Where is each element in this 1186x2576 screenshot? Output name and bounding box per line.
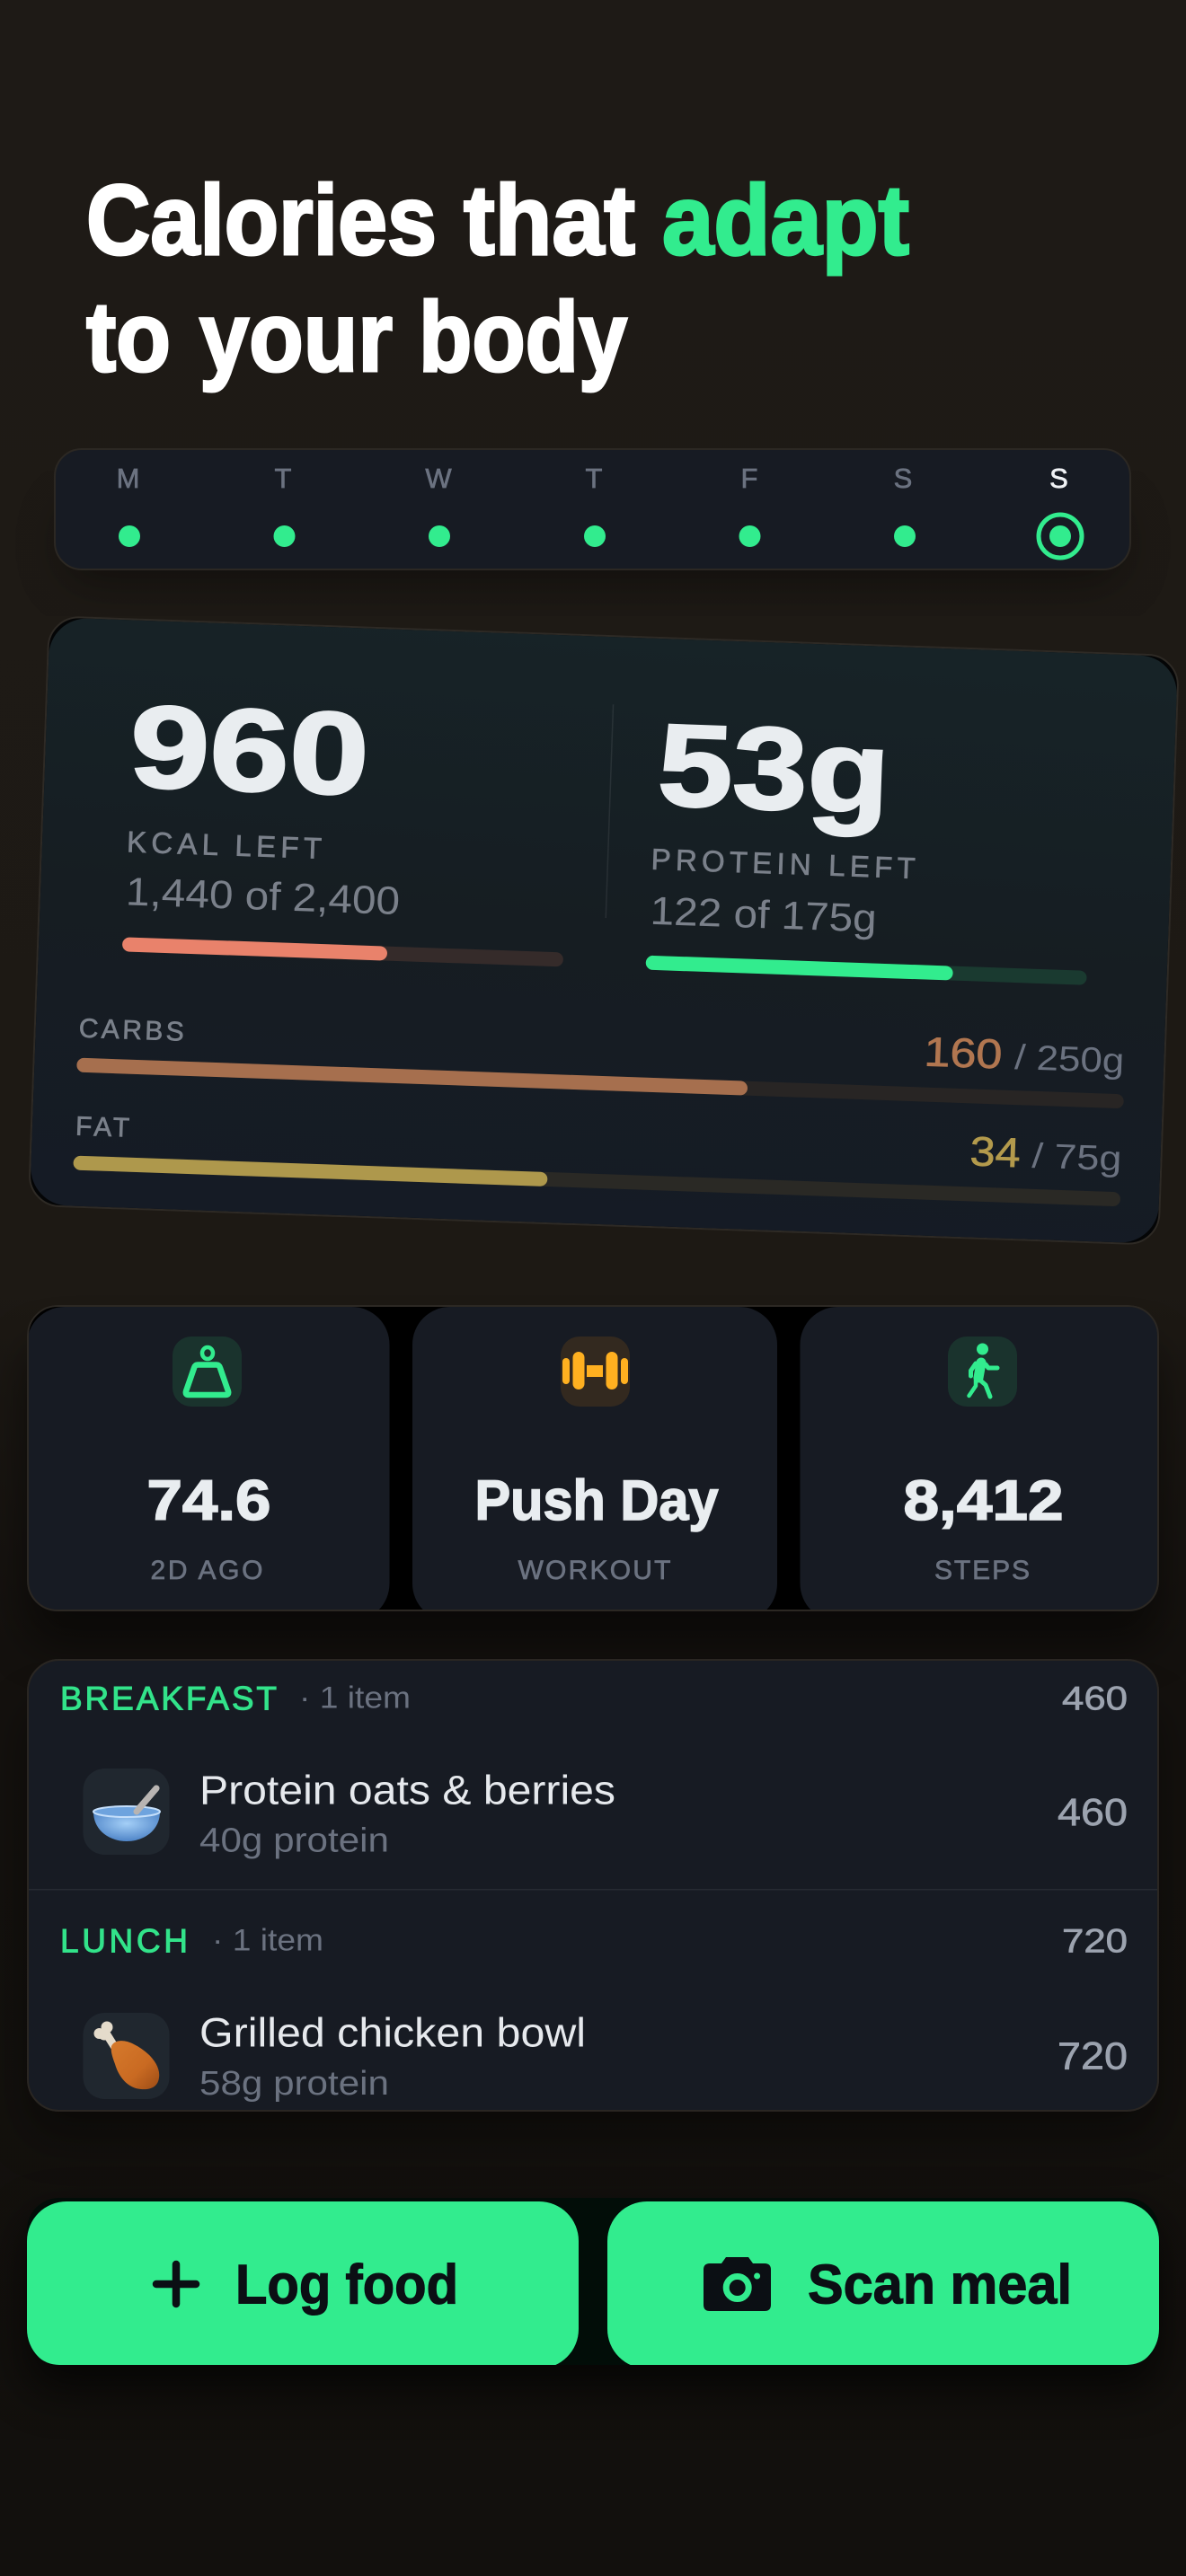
stat card: steps: 8,412	[904, 1469, 1064, 1532]
stat card: weight: 2D AGO	[151, 1556, 262, 1585]
meal: lunch: 720	[1058, 2035, 1128, 2078]
fat row	[73, 1097, 1122, 1206]
kcal left: 1,440 of 2,400	[125, 869, 401, 923]
button: log food: Log food	[235, 2254, 458, 2316]
fat row: 34	[969, 1127, 1022, 1176]
button: scan meal	[607, 2201, 1159, 2369]
carbs row: CARBS	[78, 1014, 184, 1047]
day labels: T	[586, 463, 603, 494]
day labels	[117, 463, 1068, 494]
fat row: FAT	[75, 1112, 130, 1143]
day labels: T	[275, 463, 292, 494]
meal: lunch: 720	[1062, 1923, 1128, 1960]
meal: breakfast: · 1 item	[299, 1681, 411, 1716]
title	[86, 165, 909, 393]
meal: lunch	[60, 1923, 1128, 2103]
day labels: S	[1049, 463, 1068, 494]
icon: plus	[156, 2264, 196, 2304]
icon: dumbbell	[561, 1337, 630, 1407]
day labels: M	[117, 463, 139, 494]
meal: breakfast	[60, 1681, 1128, 1859]
meal: lunch: Grilled chicken bowl	[199, 2010, 586, 2056]
title: adapt	[662, 165, 909, 276]
stat card: workout: Push Day	[474, 1469, 719, 1532]
panel: week streak	[55, 449, 1130, 569]
day labels: F	[741, 463, 757, 494]
title: your	[199, 282, 393, 393]
day completion dots	[119, 515, 1082, 558]
meal: lunch: 58g protein	[199, 2065, 389, 2103]
meal: breakfast: 40g protein	[199, 1822, 389, 1859]
panel: action buttons	[27, 2198, 1159, 2369]
kcal left	[122, 680, 572, 966]
title: that	[464, 165, 635, 276]
meal: lunch: · 1 item	[212, 1924, 323, 1958]
stat card: weight: 74.6	[147, 1469, 271, 1532]
stat card: steps	[800, 1307, 1168, 1621]
button: scan meal: Scan meal	[808, 2254, 1072, 2316]
protein left: 122 of 175g	[650, 889, 877, 941]
icon: weight	[173, 1337, 242, 1407]
day labels: W	[425, 463, 452, 494]
panel: stats row	[27, 1305, 1168, 1621]
carbs row: / 250g	[1014, 1038, 1125, 1081]
meal: lunch: LUNCH	[60, 1923, 188, 1960]
carbs row	[76, 999, 1126, 1108]
icon: chicken leg	[83, 2013, 169, 2099]
meal: breakfast: Protein oats & berries	[199, 1767, 615, 1813]
meal: breakfast: BREAKFAST	[60, 1681, 277, 1717]
kcal left: KCAL LEFT	[126, 825, 323, 865]
carbs row: 160	[924, 1028, 1003, 1078]
title: to	[86, 282, 171, 393]
panel: meals list	[27, 1659, 1159, 2112]
icon: bowl with spoon	[83, 1769, 169, 1855]
title: Calories	[86, 165, 437, 276]
protein left: 53g	[656, 699, 892, 838]
fat row: / 75g	[1031, 1137, 1122, 1178]
stat card: steps: STEPS	[934, 1556, 1030, 1585]
stat card: weight	[27, 1307, 390, 1621]
icon: camera	[704, 2257, 771, 2311]
stat card: workout	[412, 1307, 777, 1621]
icon: walking figure	[948, 1337, 1017, 1407]
kcal left: 960	[128, 681, 371, 820]
meal: breakfast: 460	[1062, 1681, 1128, 1717]
protein left	[646, 699, 1096, 985]
day labels: S	[894, 463, 912, 494]
title: body	[419, 282, 627, 393]
stat card: workout: WORKOUT	[518, 1556, 670, 1585]
button: log food	[27, 2201, 579, 2369]
protein left: PROTEIN LEFT	[651, 842, 916, 885]
meal: breakfast: 460	[1058, 1791, 1128, 1834]
panel: daily macros card	[29, 616, 1179, 1245]
